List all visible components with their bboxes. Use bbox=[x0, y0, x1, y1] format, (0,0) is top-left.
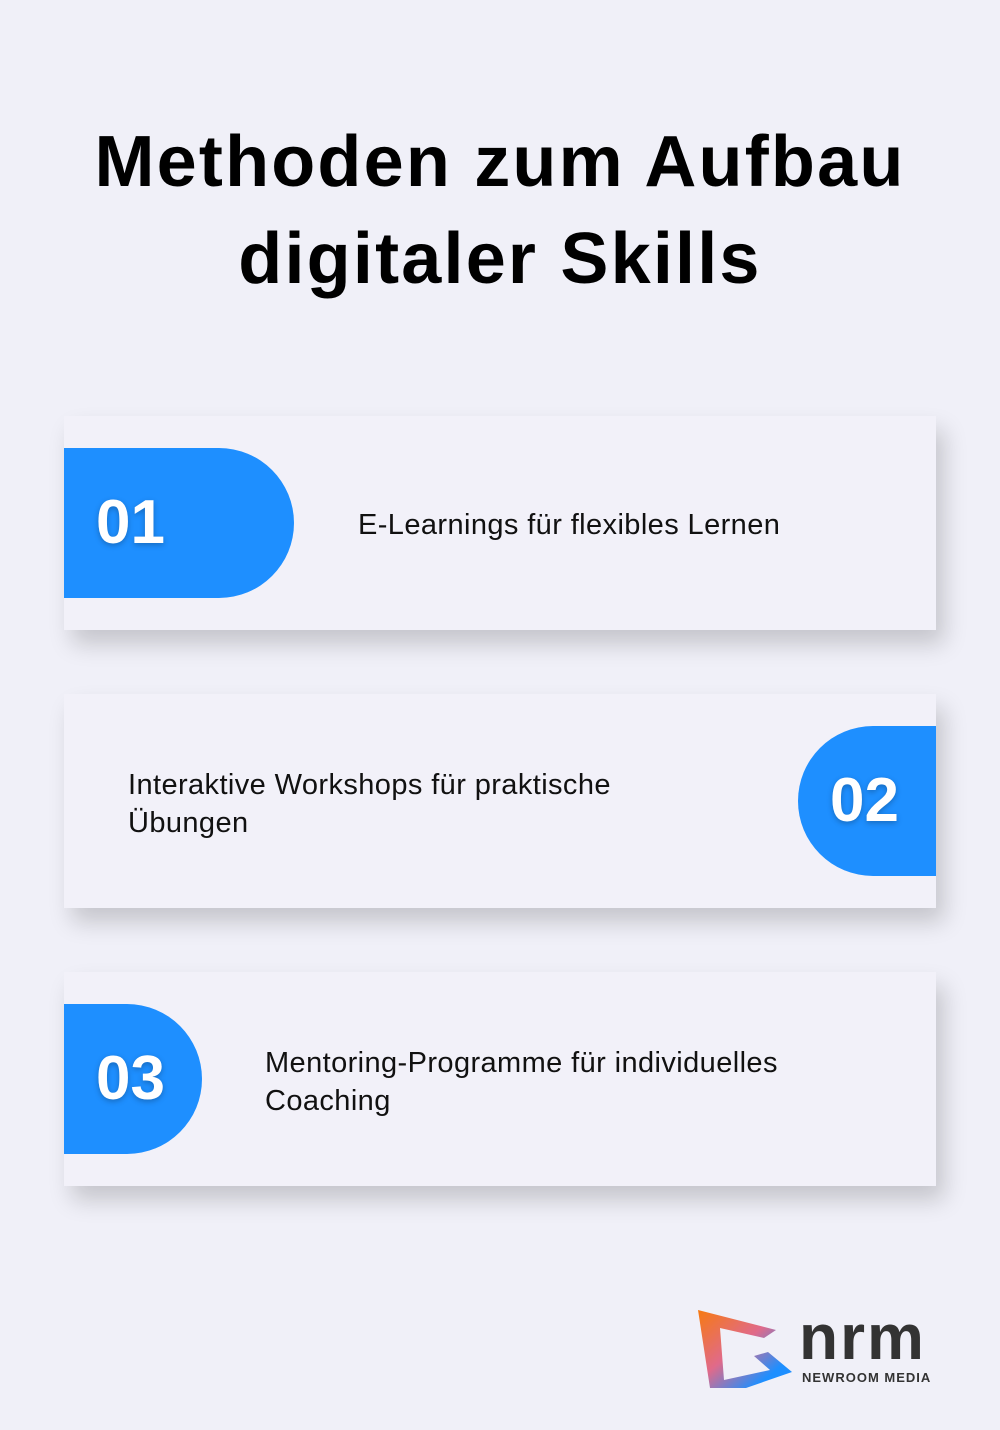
card 1 bbox=[64, 416, 936, 630]
badge 01 bbox=[64, 448, 294, 598]
badge 01: 01 bbox=[96, 488, 165, 557]
badge 02 bbox=[798, 726, 936, 876]
badge 03 bbox=[64, 1004, 202, 1154]
text 2: Übungen bbox=[128, 807, 249, 839]
logo: NEWROOM MEDIA bbox=[802, 1370, 931, 1385]
badge 03: 03 bbox=[96, 1044, 165, 1113]
title bbox=[94, 122, 906, 299]
text 2: Interaktive Workshops für praktische bbox=[128, 769, 611, 801]
logo text: nrm bbox=[799, 1301, 926, 1373]
title: Methoden zum Aufbau bbox=[94, 122, 906, 202]
text 3 bbox=[265, 1047, 778, 1117]
text 1: E-Learnings für flexibles Lernen bbox=[358, 509, 780, 541]
card 2 bbox=[64, 694, 936, 908]
badge 02: 02 bbox=[830, 766, 899, 835]
logo bbox=[698, 1301, 931, 1388]
title: digitaler Skills bbox=[238, 219, 762, 299]
card 3 bbox=[64, 972, 936, 1186]
logo icon bbox=[698, 1310, 792, 1388]
text 3: Coaching bbox=[265, 1085, 391, 1117]
text 3: Mentoring-Programme für individuelles bbox=[265, 1047, 778, 1079]
text 2 bbox=[128, 769, 611, 839]
